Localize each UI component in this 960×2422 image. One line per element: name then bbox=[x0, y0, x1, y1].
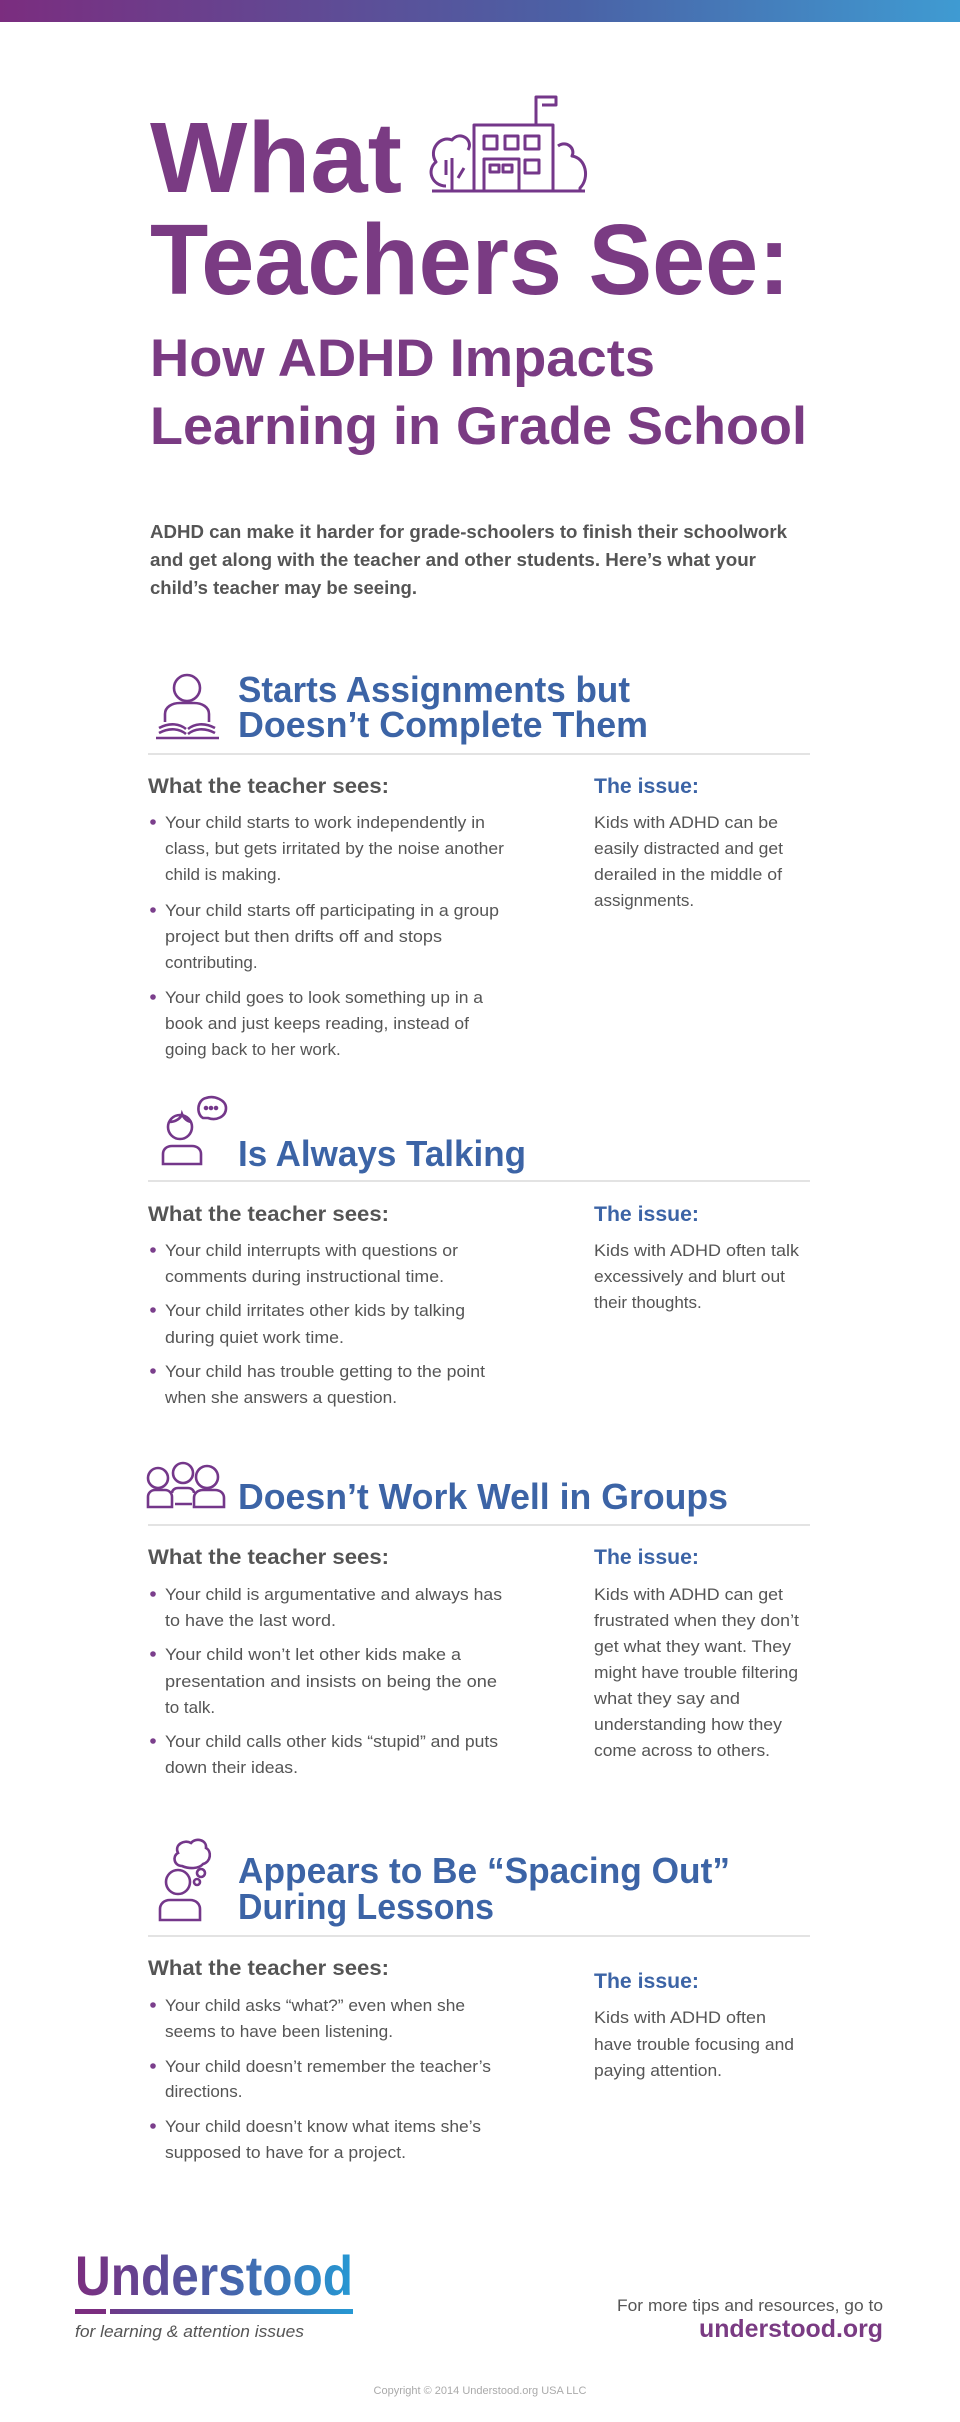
what the teacher sees list: Your child is argumentative and always has bbox=[165, 1585, 502, 1604]
call to action: understood.org bbox=[699, 2315, 883, 2343]
what the teacher sees list bbox=[148, 775, 504, 1059]
what the teacher sees list: to talk. bbox=[165, 1698, 215, 1717]
icon: group of people bbox=[148, 1463, 224, 1507]
title: Teachers See: bbox=[150, 204, 790, 316]
heading: Starts Assignments but bbox=[238, 669, 630, 710]
what the teacher sees list: comments during instructional time. bbox=[165, 1267, 444, 1286]
heading: During Lessons bbox=[238, 1886, 494, 1927]
the issue: might have trouble filtering bbox=[594, 1663, 798, 1682]
what the teacher sees list: to have the last word. bbox=[165, 1611, 336, 1630]
heading: Doesn’t Complete Them bbox=[238, 704, 648, 745]
icon: person daydreaming bbox=[160, 1840, 210, 1920]
heading bbox=[238, 1850, 730, 1927]
what the teacher sees list: child is making. bbox=[165, 865, 281, 884]
what the teacher sees list: Your child interrupts with questions or bbox=[165, 1241, 458, 1260]
the issue: come across to others. bbox=[594, 1741, 770, 1760]
what the teacher sees list: What the teacher sees: bbox=[148, 1203, 389, 1226]
title: What bbox=[150, 102, 402, 214]
call to action bbox=[617, 2296, 883, 2343]
what the teacher sees list: book and just keeps reading, instead of bbox=[165, 1014, 469, 1033]
what the teacher sees list: down their ideas. bbox=[165, 1758, 298, 1777]
heading: Doesn’t Work Well in Groups bbox=[238, 1476, 728, 1517]
what the teacher sees list bbox=[148, 1203, 485, 1407]
the issue: their thoughts. bbox=[594, 1293, 702, 1312]
what the teacher sees list: Your child asks “what?” even when she bbox=[165, 1996, 465, 2015]
the issue bbox=[594, 775, 783, 910]
the issue: Kids with ADHD can get bbox=[594, 1585, 783, 1604]
the issue: have trouble focusing and bbox=[594, 2035, 794, 2054]
what the teacher sees list: What the teacher sees: bbox=[148, 1546, 389, 1569]
what the teacher sees list: Your child irritates other kids by talking bbox=[165, 1301, 465, 1320]
the issue: The issue: bbox=[594, 775, 699, 798]
the issue: easily distracted and get bbox=[594, 839, 783, 858]
what the teacher sees list: during quiet work time. bbox=[165, 1328, 344, 1347]
intro paragraph: ADHD can make it harder for grade-schoolers to finish their schoolwork bbox=[150, 522, 788, 542]
the issue: what they say and bbox=[593, 1689, 740, 1708]
what the teacher sees list: Your child won’t let other kids make a bbox=[165, 1645, 462, 1664]
what the teacher sees list: Your child calls other kids “stupid” and puts bbox=[165, 1732, 498, 1751]
subtitle bbox=[150, 329, 807, 456]
icon: person reading book bbox=[156, 675, 219, 738]
what the teacher sees list: Your child doesn’t remember the teacher’s bbox=[165, 2057, 491, 2076]
what the teacher sees list: What the teacher sees: bbox=[148, 775, 389, 798]
what the teacher sees list: Your child starts to work independently in bbox=[165, 813, 485, 832]
what the teacher sees list: Your child doesn’t know what items she’s bbox=[165, 2117, 481, 2136]
copyright: Copyright © 2014 Understood.org USA LLC bbox=[374, 2385, 587, 2397]
logo: Understood: Understood bbox=[75, 2244, 353, 2307]
the issue: excessively and blurt out bbox=[594, 1267, 785, 1286]
the issue: derailed in the middle of bbox=[594, 865, 782, 884]
what the teacher sees list: contributing. bbox=[165, 953, 258, 972]
what the teacher sees list: when she answers a question. bbox=[164, 1388, 397, 1407]
what the teacher sees list bbox=[148, 1546, 502, 1777]
logo: Understood: for learning & attention issues bbox=[75, 2322, 305, 2341]
heading bbox=[238, 669, 648, 745]
intro paragraph bbox=[150, 522, 788, 598]
what the teacher sees list: What the teacher sees: bbox=[148, 1957, 389, 1980]
what the teacher sees list: directions. bbox=[165, 2082, 242, 2101]
title bbox=[150, 102, 790, 316]
subtitle: How ADHD Impacts bbox=[150, 329, 655, 388]
the issue: Kids with ADHD can be bbox=[594, 813, 778, 832]
intro paragraph: and get along with the teacher and other students. Here’s what your bbox=[150, 550, 756, 570]
what the teacher sees list: project but then drifts off and stops bbox=[165, 927, 442, 946]
what the teacher sees list: Your child has trouble getting to the point bbox=[165, 1362, 485, 1381]
the issue: paying attention. bbox=[594, 2061, 722, 2080]
the issue: The issue: bbox=[594, 1546, 699, 1569]
logo: Understood bbox=[75, 2244, 353, 2341]
top gradient bar bbox=[0, 0, 960, 22]
intro paragraph: child’s teacher may be seeing. bbox=[150, 578, 417, 598]
the issue bbox=[594, 1970, 794, 2080]
what the teacher sees list: supposed to have for a project. bbox=[165, 2143, 406, 2162]
heading: Appears to Be “Spacing Out” bbox=[238, 1850, 730, 1891]
subtitle: Learning in Grade School bbox=[150, 397, 807, 456]
the issue: The issue: bbox=[594, 1970, 699, 1993]
the issue: understanding how they bbox=[594, 1715, 783, 1734]
icon: school building bbox=[431, 97, 586, 191]
what the teacher sees list: Your child starts off participating in a group bbox=[165, 901, 499, 920]
what the teacher sees list: Your child goes to look something up in a bbox=[165, 988, 484, 1007]
what the teacher sees list: presentation and insists on being the one bbox=[165, 1672, 497, 1691]
panel: groups bbox=[148, 1463, 810, 1777]
the issue: Kids with ADHD often talk bbox=[594, 1241, 800, 1260]
what the teacher sees list: seems to have been listening. bbox=[165, 2022, 393, 2041]
the issue: frustrated when they don’t bbox=[594, 1611, 799, 1630]
panel: spacing out bbox=[148, 1840, 810, 2162]
call to action: For more tips and resources, go to bbox=[617, 2296, 883, 2315]
the issue: Kids with ADHD often bbox=[594, 2008, 766, 2027]
what the teacher sees list bbox=[148, 1957, 491, 2162]
panel: always talking bbox=[148, 1097, 810, 1407]
panel: starts assignments bbox=[148, 669, 810, 1059]
what the teacher sees list: going back to her work. bbox=[165, 1040, 341, 1059]
the issue: get what they want. They bbox=[594, 1637, 792, 1656]
heading: Is Always Talking bbox=[238, 1133, 526, 1174]
the issue: The issue: bbox=[594, 1203, 699, 1226]
the issue: assignments. bbox=[594, 891, 694, 910]
what the teacher sees list: class, but gets irritated by the noise another bbox=[165, 839, 504, 858]
the issue bbox=[594, 1203, 800, 1312]
icon: person talking bbox=[163, 1097, 226, 1164]
the issue bbox=[593, 1546, 799, 1760]
